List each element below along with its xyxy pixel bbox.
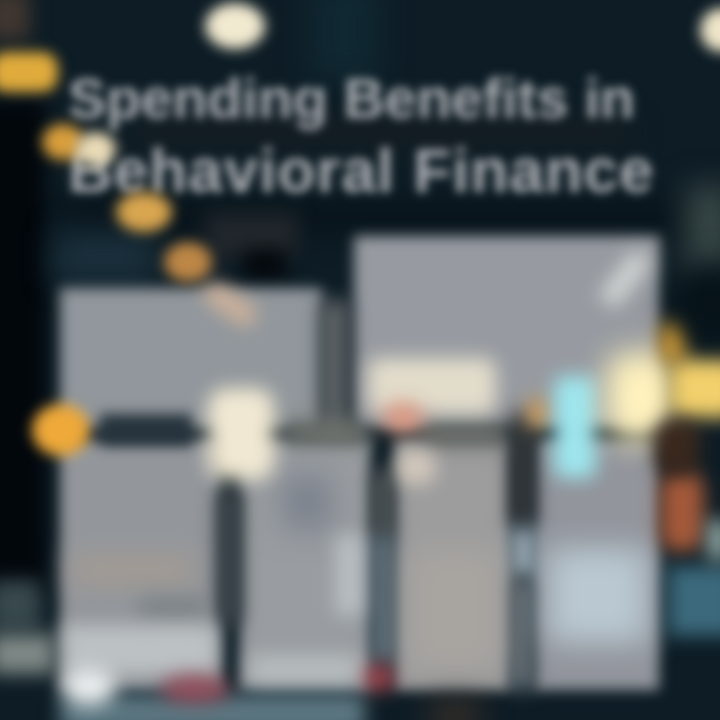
cream glow: centre	[368, 358, 496, 414]
cream glow right	[606, 352, 676, 442]
bottom strip brown	[430, 700, 480, 720]
figure: reddish skin	[660, 470, 704, 552]
red blob bottom	[160, 675, 230, 703]
figure: blue shirt	[668, 566, 720, 636]
dark figure head	[672, 262, 720, 346]
teal floor left	[0, 580, 40, 630]
band across panels right	[420, 422, 510, 448]
ceiling light: top right	[700, 8, 720, 52]
divider column between upper panels	[318, 300, 350, 440]
column gap 3 top	[510, 412, 536, 527]
pale patch column 2	[336, 535, 362, 615]
panel: lower column 2	[240, 440, 370, 690]
panel: upper right	[354, 236, 660, 426]
figure: dark hair	[654, 418, 700, 476]
cream patch below red glow	[397, 450, 435, 484]
dark band between title lines	[130, 124, 630, 142]
orange light: top left	[0, 52, 58, 92]
red blob bottom centre	[364, 664, 394, 692]
panel: lower column 1	[60, 440, 220, 690]
bottom strip blue	[60, 694, 365, 720]
warm patch column 3	[410, 550, 500, 670]
column gap 3 lower	[510, 580, 534, 690]
band across panels left	[285, 420, 370, 446]
panel: upper left	[60, 288, 322, 428]
red glow	[382, 402, 424, 434]
background dark behind title	[60, 205, 720, 229]
column gap 1	[216, 490, 242, 625]
pale blue column 4	[548, 548, 648, 643]
orange tail	[199, 278, 261, 330]
panel: lower column 4	[535, 440, 659, 690]
dark label bar	[100, 414, 192, 446]
left dark strip	[0, 100, 46, 590]
white light	[76, 132, 116, 166]
orange light 4	[164, 242, 212, 282]
dark block under title	[206, 213, 298, 259]
title	[64, 67, 658, 206]
column gap 3 middle	[510, 527, 536, 577]
figure: pale edge	[708, 520, 720, 560]
step circle: orange	[32, 404, 90, 456]
white blob bottom left	[62, 668, 116, 706]
right grey patch	[685, 185, 720, 280]
orange light 3	[116, 192, 172, 232]
title line 1: Spending Benefits in	[68, 67, 635, 131]
dark patch column 1	[140, 597, 206, 621]
black block under title	[243, 250, 287, 278]
column gap 2 top	[372, 470, 394, 540]
orange edge above yellow glow	[660, 322, 686, 362]
yellow glow right	[670, 358, 720, 418]
ceiling light: brown top left	[0, 0, 30, 40]
white stroke top right panel	[597, 248, 653, 310]
cream glow: centre left	[208, 388, 274, 480]
pale bottom column 1	[62, 625, 217, 675]
dark patch column 2	[282, 475, 332, 530]
title line 2: Behavioral Finance	[68, 137, 655, 206]
pale bottom column 2	[250, 655, 360, 685]
column gap 2 lower	[372, 535, 394, 665]
ceiling light: top centre	[205, 3, 265, 49]
orange dot right	[526, 396, 550, 430]
orange light 2	[42, 124, 84, 160]
panel: lower column 3	[395, 440, 510, 690]
cyan glow	[554, 376, 596, 478]
grey floor left	[0, 634, 55, 674]
teal patch above left panel	[55, 232, 155, 282]
background teal top	[310, 0, 380, 80]
warm band column 1	[70, 558, 195, 582]
